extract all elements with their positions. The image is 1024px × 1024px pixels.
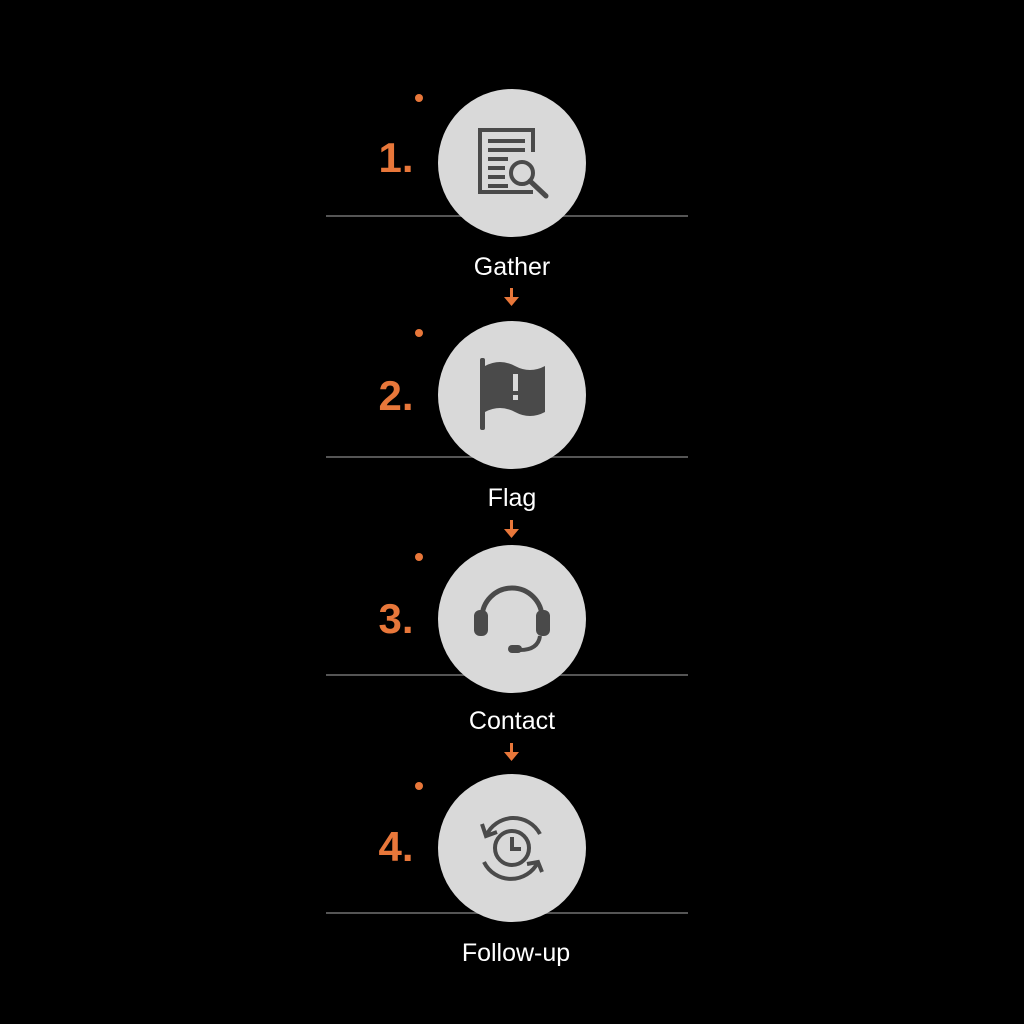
dot 4 <box>415 782 423 790</box>
number 4: 4. <box>378 823 414 870</box>
icon: headset <box>474 588 550 653</box>
circle 2 <box>438 321 586 469</box>
number 2: 2. <box>378 372 414 419</box>
number 3: 3. <box>378 595 414 642</box>
step 4: Follow-up <box>326 774 688 967</box>
dot 1 <box>415 94 423 102</box>
label: Contact: Contact <box>469 707 555 735</box>
circle 3 <box>438 545 586 693</box>
arrow 2 <box>504 520 519 538</box>
icon: document search <box>480 130 546 196</box>
dot 2 <box>415 329 423 337</box>
step 3: Contact <box>326 545 688 761</box>
circle 4 <box>438 774 586 922</box>
label: Gather: Gather <box>474 253 550 281</box>
number 1: 1. <box>378 134 414 181</box>
icon: clock refresh <box>482 818 542 879</box>
circle 1 <box>438 89 586 237</box>
label: Flag: Flag <box>488 484 536 512</box>
label: Follow-up: Follow-up <box>462 939 570 967</box>
dot 3 <box>415 553 423 561</box>
step 1: Gather <box>326 89 688 306</box>
step 2: Flag <box>326 321 688 538</box>
arrow 3 <box>504 743 519 761</box>
icon: flag <box>480 358 545 430</box>
arrow 1 <box>504 288 519 306</box>
